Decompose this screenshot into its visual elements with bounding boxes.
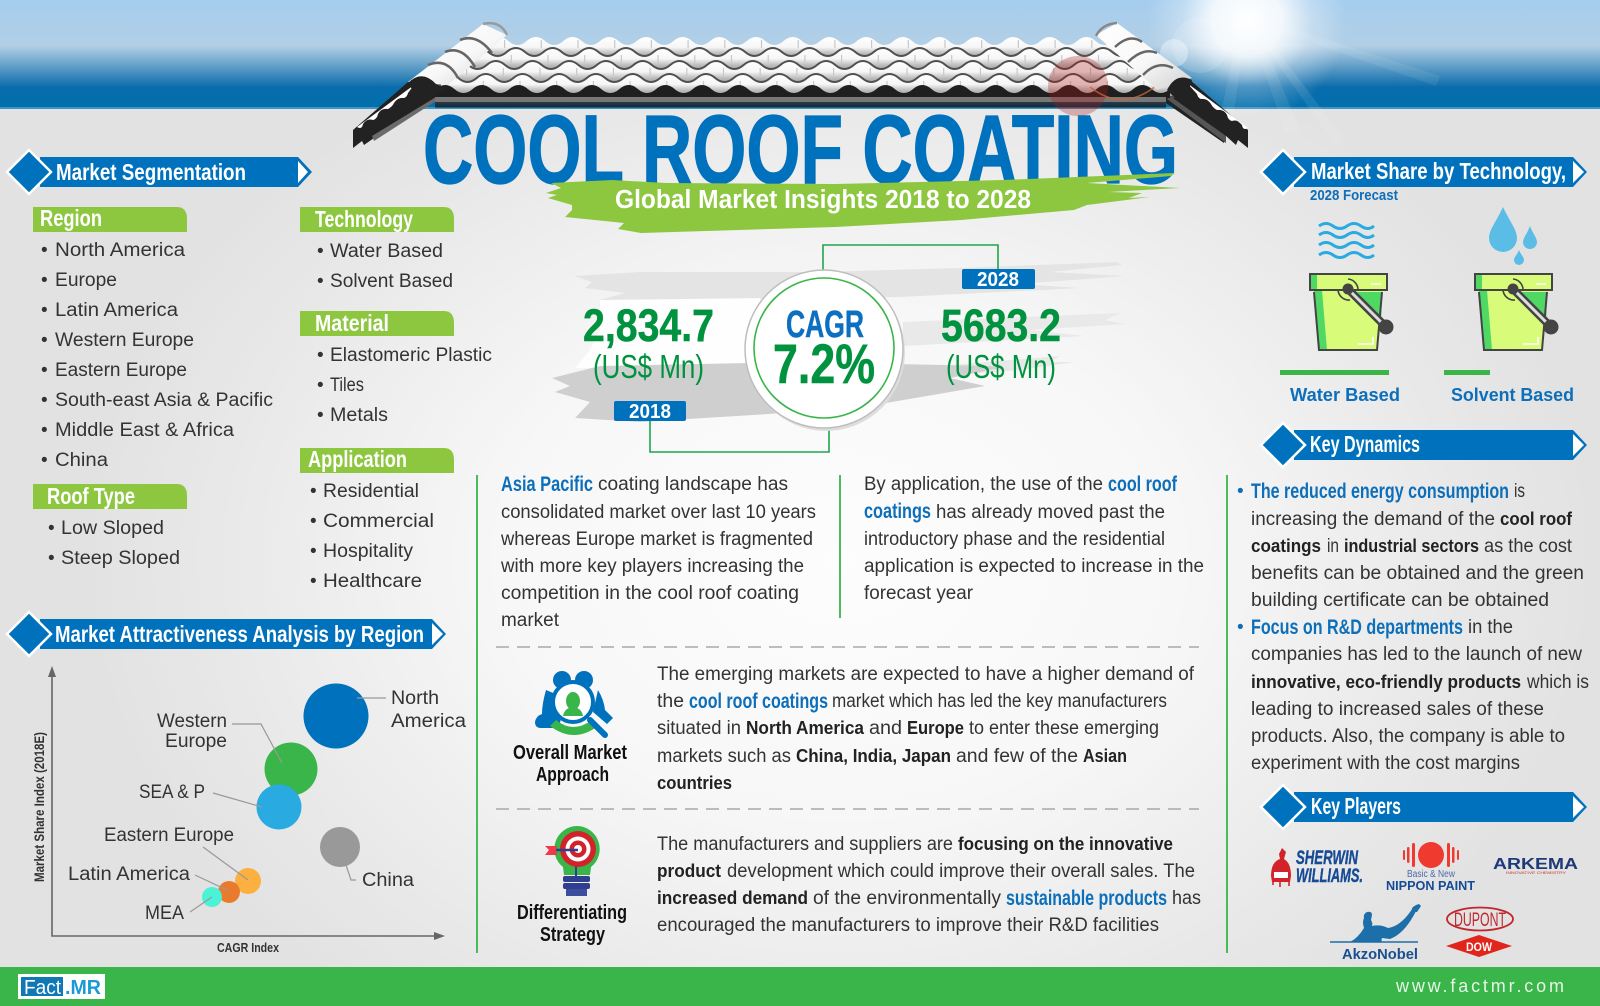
text block: Asia Pacific [500,473,816,631]
panel: region: Europe [55,270,117,291]
text block: innovative product: of the environmentally [813,888,1001,909]
label: overall market approach: Overall Market [513,742,627,764]
panel: application: Hospitality [323,541,413,562]
text block: emerging markets [657,664,1195,793]
bubble labels: MEA [145,903,184,924]
header: Key Dynamics: Key Dynamics [1310,431,1420,457]
header: Market Share by Technology: 2028 Forecast [1310,187,1398,204]
footer bar [0,967,1600,1006]
left ridge cap [408,23,507,102]
label: differentiating strategy: Strategy [540,924,606,946]
text block: emerging markets: and [869,718,902,739]
leader lines [190,698,386,912]
panel: region: • [41,270,48,291]
bubble labels: Latin America [68,864,190,885]
text block: key dynamics: companies has led to the launch of new [1251,644,1582,665]
bubble labels: Europe [165,731,227,752]
text block: emerging markets: Asian [1083,745,1127,766]
header: Key Players [1261,785,1587,829]
text block: innovative product: development which could improve their overall sales. The [727,861,1195,882]
text block: Asia Pacific: Asia Pacific [501,473,593,496]
panel: application [300,446,454,592]
panel: material: • [317,345,324,366]
value 2018: (US$ Mn) [593,348,704,385]
text block: innovative product: encouraged the manufacturers to improve their R&D facilities [657,915,1159,936]
panel: region: North America [55,240,185,261]
header: Key Players: Key Players [1311,793,1401,819]
text block: Asia Pacific: market [501,610,560,631]
share bar: solvent based [1444,370,1574,405]
text block: innovative product [657,833,1201,936]
panel: material: Metals [330,405,388,426]
text block: emerging markets: the [657,691,684,712]
text block: emerging markets: cool roof coatings [689,690,828,713]
label: differentiating strategy [517,902,627,946]
tile rows [435,37,1174,116]
text block: innovative product: sustainable products [1006,887,1167,910]
panel: technology: Water Based [330,241,443,262]
panel: roof type: • [48,518,55,539]
logo: AkzoNobel: AkzoNobel [1342,946,1418,963]
roof illustration [353,23,1248,148]
logo: DuPont: DUPONT [1454,910,1506,931]
value 2018: 2018 [629,401,671,423]
logo: Nippon Paint [1386,842,1475,893]
header: Market Attractiveness [7,612,446,656]
logo: Dow: DOW [1466,940,1493,954]
bubble labels: North [391,688,439,709]
icon: water bucket [1310,274,1394,350]
CAGR circle [745,270,905,431]
panel: material [300,310,492,426]
logo: Dow [1446,935,1512,957]
text block: emerging markets: The emerging markets are expected to have a higher demand of [657,664,1195,685]
text block: key dynamics [1237,480,1589,774]
text block: by application: forecast year [864,583,974,604]
text block: emerging markets: North America [746,717,865,738]
panel: region [33,205,273,471]
panel: region: • [41,420,48,441]
text block: by application: By application, the use of the [864,474,1103,495]
right ridge cap [1096,23,1192,98]
panel: application: • [310,481,317,502]
panel: region: Middle East & Africa [55,420,234,441]
text block: innovative product: increased demand [657,887,808,908]
panel: roof type: Roof Type [47,483,135,509]
panel: application: Residential [323,481,419,502]
sky and sea banner [0,0,1600,109]
CAGR circle: CAGR [786,304,864,346]
label: differentiating strategy: Differentiating [517,902,627,924]
text block: key dynamics: products. Also, the company is able to [1251,726,1565,747]
share bar: water based: Water Based [1290,384,1400,405]
panel: region: • [41,330,48,351]
bubble labels [68,688,466,924]
text block: emerging markets: and few of the [956,746,1078,767]
tag: region [33,207,187,232]
text block: key dynamics: innovative, eco-friendly products [1251,671,1521,692]
panel: region: • [41,240,48,261]
logo: Fact.MR [18,974,105,999]
text block: Asia Pacific: whereas Europe market is fragmented [500,529,813,550]
text block: key dynamics: • [1237,617,1244,638]
panel: application: • [310,511,317,532]
panel: technology: Technology [315,206,413,232]
website url: www.factmr.com [1395,976,1564,996]
panel: roof type [33,483,187,569]
text block: emerging markets: market which has led the key manufacturers [832,691,1167,712]
text block: key dynamics: cool roof [1500,508,1573,529]
logo: Sherwin Williams: WILLIAMS. [1296,866,1363,887]
text block: Asia Pacific: coating landscape has [598,474,788,495]
title: COOL ROOF COATING [423,95,1178,204]
value 2028: (US$ Mn) [946,348,1056,385]
label: overall market approach [513,742,627,786]
text block: key dynamics: in [1327,536,1339,557]
share bar: solvent based: Solvent Based [1451,384,1574,405]
CAGR circle: 7.2% [773,332,875,395]
text block: Asia Pacific: competition in the cool roof coating [501,583,799,604]
panel: region: • [41,450,48,471]
sun glare [1147,0,1440,145]
label: overall market approach: Approach [536,764,609,786]
bubbles [202,684,368,907]
header: Market Share by Technology [1261,150,1587,204]
text block: innovative product: product [657,860,721,881]
CAGR panel [552,245,1125,452]
text block: emerging markets: situated in [657,718,741,739]
subtitle on green brush [546,173,1180,233]
text block: innovative product: The manufacturers and suppliers are [657,834,953,855]
bubble labels: Eastern Europe [104,825,234,846]
header: Market Segmentation: Market Segmentation [56,159,246,185]
text block: by application: coatings [864,500,931,523]
icon: solvent drops [1489,207,1537,265]
panel: material: • [317,405,324,426]
text block: by application: application is expected to increase in the [864,556,1204,577]
text block: emerging markets: markets such as [657,746,791,767]
bubble labels: America [391,711,466,732]
panel: roof type: Low Sloped [61,518,164,539]
text block: emerging markets: to enter these emerging [969,718,1159,739]
text block: innovative product: has [1172,888,1201,909]
panel: region: South-east Asia & Pacific [55,390,273,411]
panel: application: • [310,571,317,592]
text block: Asia Pacific: with more key players increasing the [500,556,804,577]
right roof edge [1166,80,1248,148]
panel: region: Region [40,205,102,231]
panel: material: Material [315,310,389,336]
value 2028: 2028 [977,269,1019,291]
text block: key dynamics: coatings [1251,535,1321,556]
text block: by application [864,473,1204,604]
bubble labels: China [362,870,414,891]
panel: material: Elastomeric Plastic [330,345,492,366]
text block: emerging markets: Europe [907,717,964,738]
share bar: water based [1280,370,1400,405]
value 2028: 5683.2 [941,300,1061,351]
text block: key dynamics: building certificate can be obtained [1251,590,1549,611]
panel: technology [300,206,454,292]
value 2028 [941,269,1061,385]
logo: Arkema: ARKEMA [1493,856,1579,873]
panel: region: • [41,300,48,321]
text block: key dynamics: Focus on R&D departments [1251,616,1463,639]
text block: by application: has already moved past the [936,502,1165,523]
text block: by application: cool roof [1108,473,1178,496]
text block: key dynamics: industrial sectors [1344,535,1479,556]
connector lines [650,245,998,452]
text block: key dynamics: The reduced energy consumption [1251,480,1509,503]
panel: application: Commercial [323,511,434,532]
text block: key dynamics: as the cost [1484,536,1573,557]
text block: key dynamics: is [1514,481,1525,502]
logo: Fact.MR: .MR [65,977,102,999]
icon: water waves [1319,224,1374,258]
panel: technology: • [317,241,324,262]
header: Key Dynamics [1261,423,1587,467]
logo: Sherwin Williams [1271,848,1363,887]
panel: technology: Solvent Based [330,271,453,292]
bubble labels: SEA & P [139,782,205,803]
logo: Arkema: INNOVATIVE CHEMISTRY [1506,871,1567,875]
panel: region: China [55,450,108,471]
text block: innovative product: focusing on the innovative [958,833,1173,854]
grey brush strokes [552,262,1125,422]
panel: application: Healthcare [323,571,422,592]
x axis label: CAGR Index [217,940,280,955]
logo: Nippon Paint: NIPPON PAINT [1386,878,1475,893]
text block: key dynamics: which is [1526,672,1589,693]
axes [48,666,445,940]
panel: application: • [310,541,317,562]
text block: key dynamics: leading to increased sales of these [1251,699,1544,720]
logo: DuPont [1447,908,1513,931]
logo: Sherwin Williams: SHERWIN [1296,848,1359,869]
text block: key dynamics: experiment with the cost margins [1251,753,1520,774]
bubble chart [32,666,466,955]
panel: application: Application [308,446,407,472]
text block: key dynamics: • [1237,481,1244,502]
text block: key dynamics: increasing the demand of the [1251,509,1495,530]
value 2018: 2,834.7 [583,300,714,351]
logo: Fact.MR: Fact [24,977,61,999]
text block: Asia Pacific: consolidated market over last 10 years [501,502,816,523]
icon: overall market approach [535,671,613,735]
header: Market Attractiveness: Market Attractiveness Analysis by Region [55,621,424,647]
icon: solvent bucket [1475,274,1558,350]
text block: emerging markets: countries [657,772,732,793]
panel: region: Latin America [55,300,178,321]
value 2018 [583,300,714,423]
panel: material: Tiles [330,375,364,396]
icon: differentiating strategy [545,826,600,896]
panel: roof type: • [48,548,55,569]
header: Market Segmentation [7,150,312,194]
panel: region: • [41,390,48,411]
panel: material: • [317,375,324,396]
panel: region: • [41,360,48,381]
text block: by application: introductory phase and the residential [864,529,1165,550]
y axis label: Market Share Index (2018E) [32,732,47,882]
panel: region: Western Europe [55,330,194,351]
subtitle on green brush: Global Market Insights 2018 to 2028 [615,186,1031,214]
text block: emerging markets: China, India, Japan [796,745,951,766]
left roof edge [353,82,445,148]
panel: technology: • [317,271,324,292]
text block: key dynamics: in the [1468,617,1513,638]
text block: key dynamics: benefits can be obtained and the green [1251,563,1584,584]
panel: region: Eastern Europe [55,360,187,381]
bubble labels: Western [157,711,227,732]
panel: roof type: Steep Sloped [61,548,180,569]
logo: AkzoNobel [1330,904,1421,963]
logo: Nippon Paint: Basic & New [1407,869,1456,880]
